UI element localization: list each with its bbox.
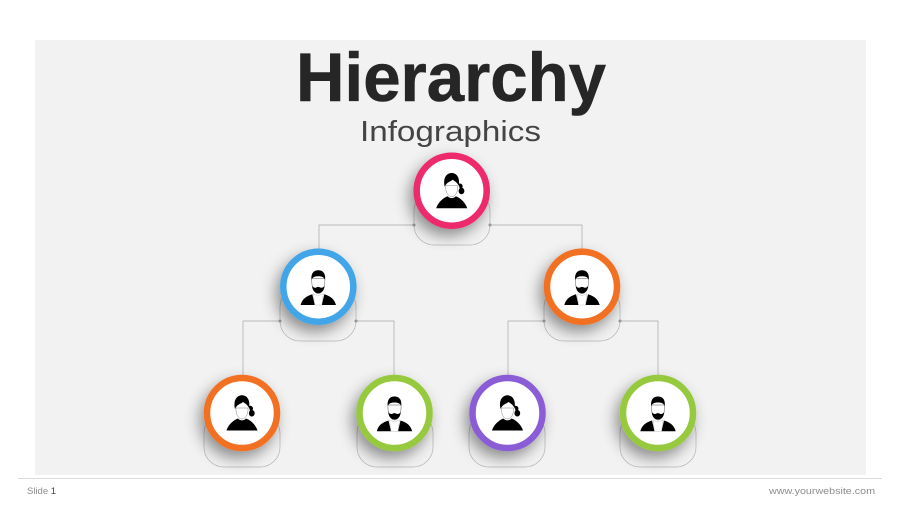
node: team member 3, purple	[469, 378, 545, 467]
footer: website: www.yourwebsite.com	[768, 486, 875, 497]
background panel	[35, 40, 866, 475]
connectors	[243, 225, 658, 376]
node: left manager, blue	[278, 252, 358, 341]
node: team member 4, green	[620, 378, 696, 467]
subtitle: Infographics	[360, 116, 541, 148]
node: right manager, orange	[542, 252, 622, 341]
node: team member 2, green	[357, 378, 433, 467]
node: top manager, pink	[412, 156, 492, 245]
node: team member 1, orange	[204, 378, 280, 467]
title: Hierarchy	[296, 39, 606, 116]
footer rule	[18, 478, 882, 479]
footer: slide number: Slide 1	[27, 486, 56, 497]
